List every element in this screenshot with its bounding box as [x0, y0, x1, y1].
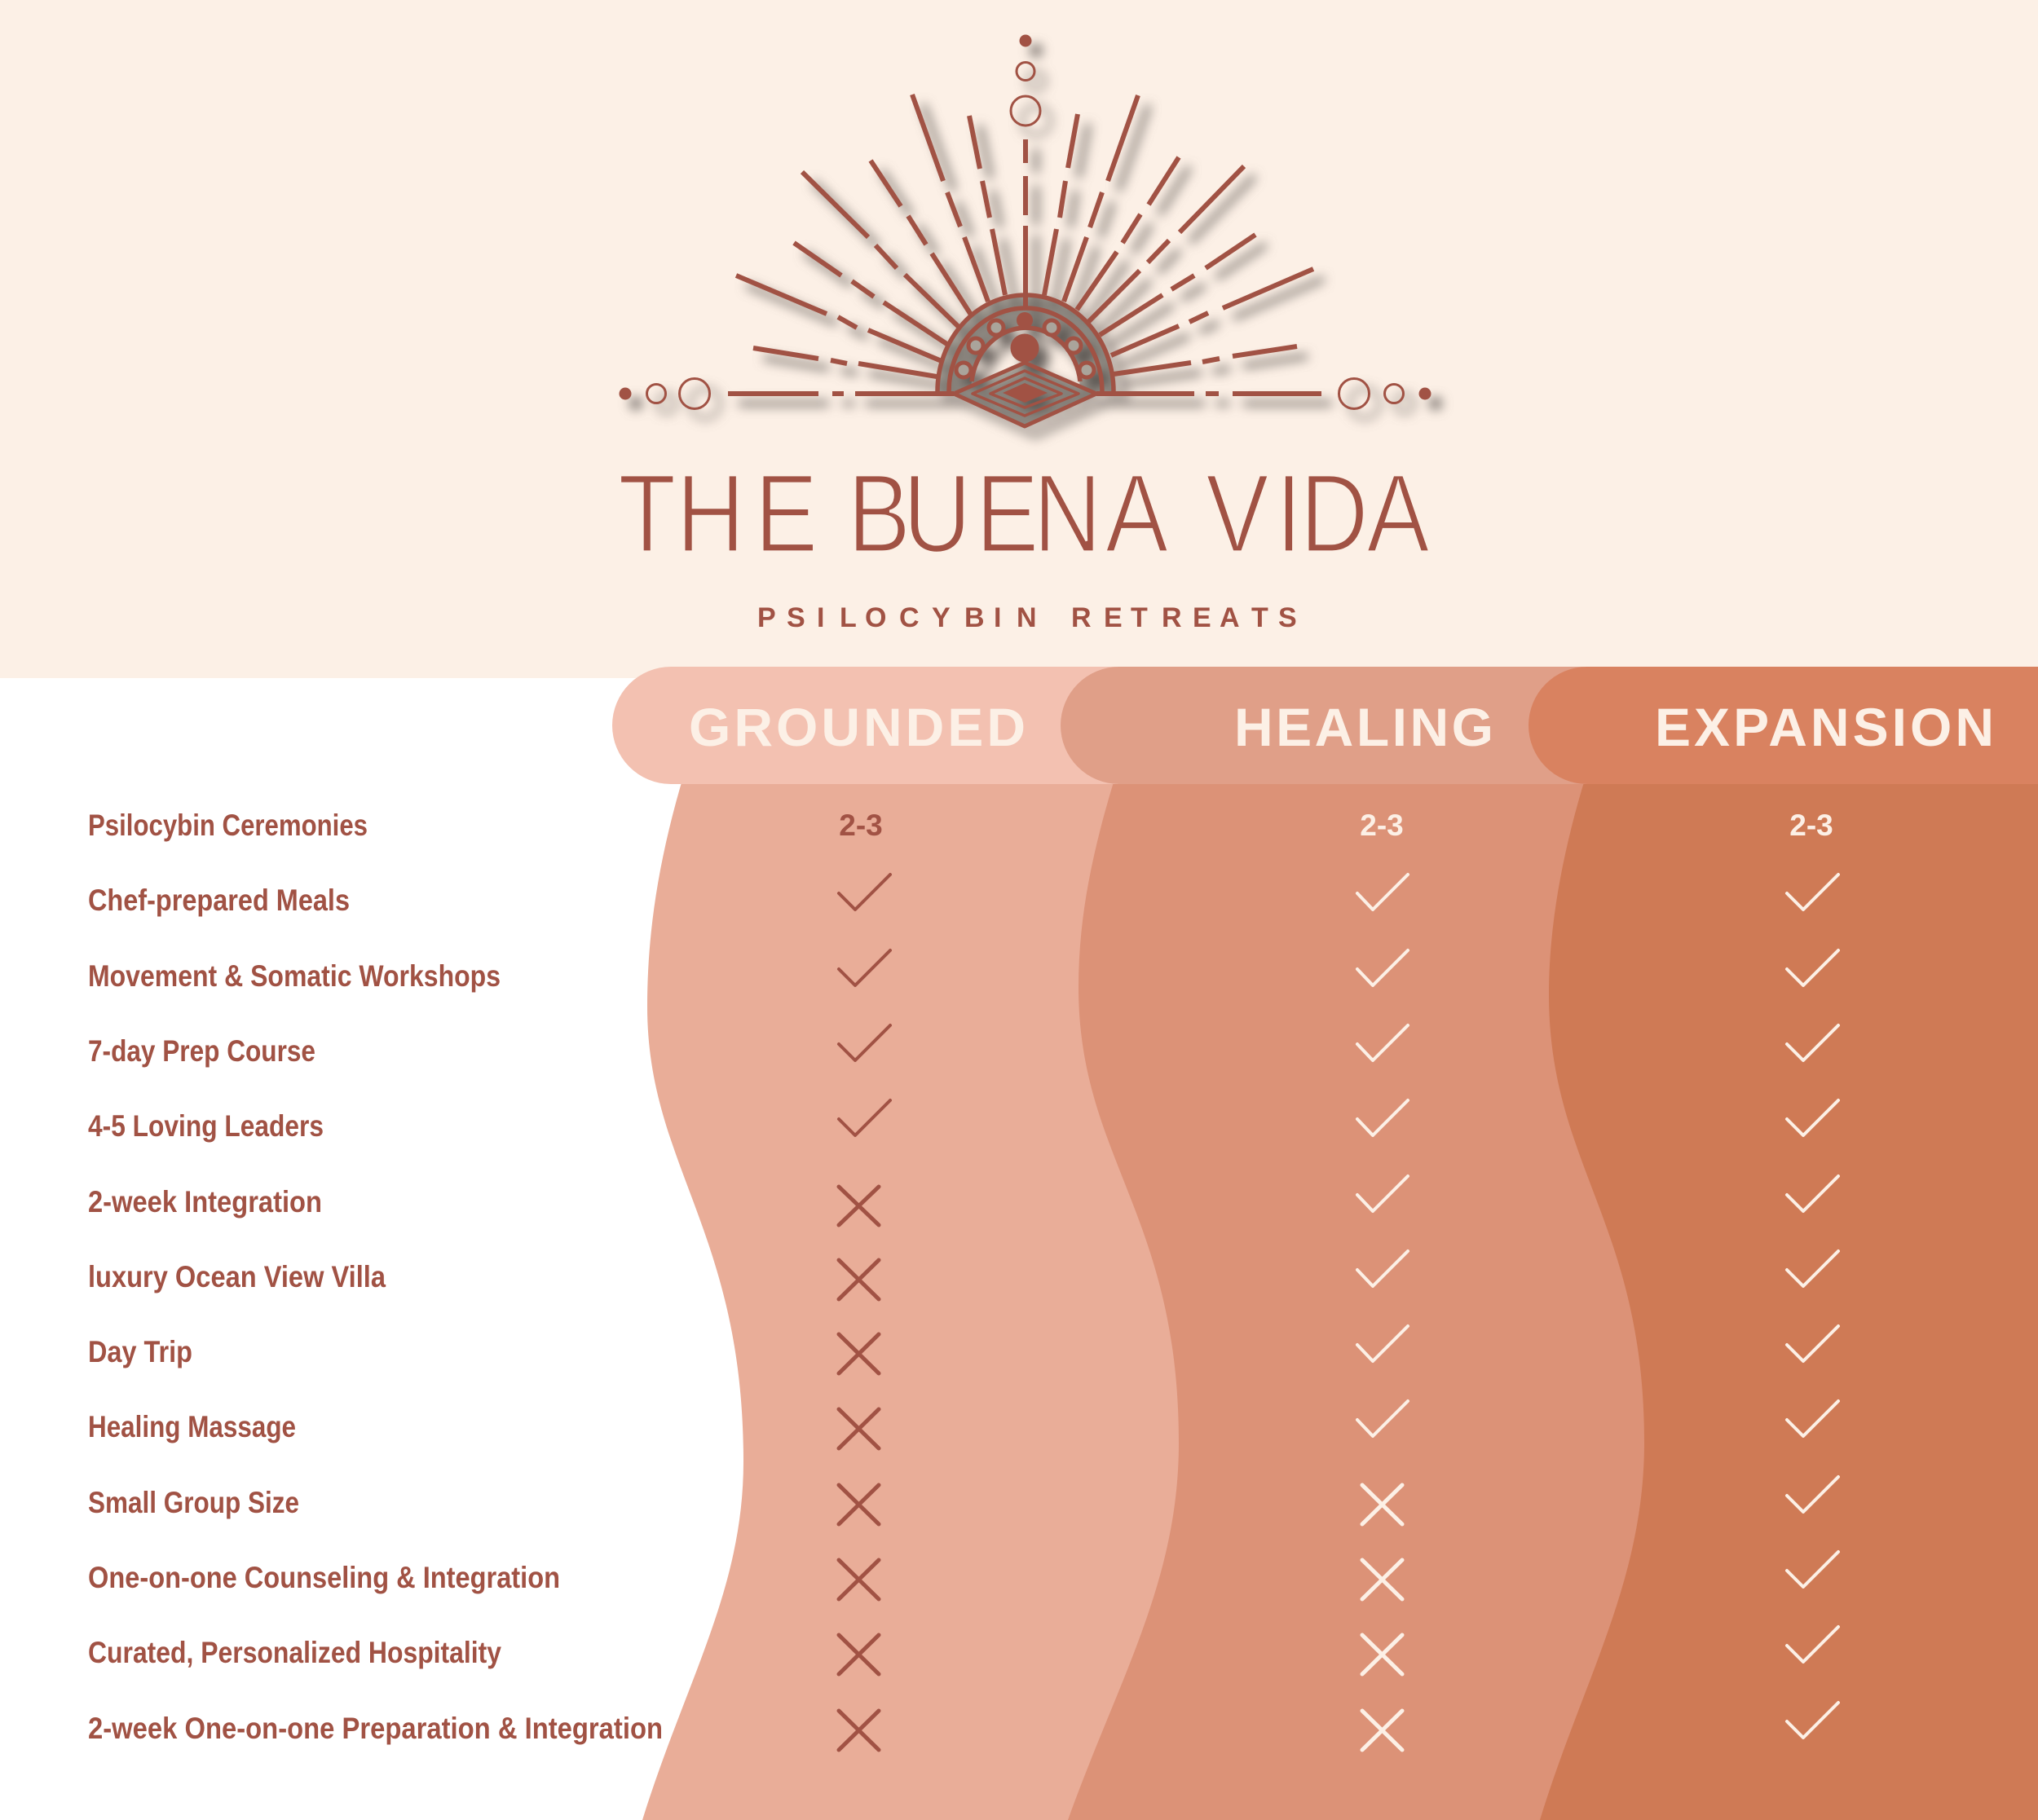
tab: expansion: EXPANSION [1655, 697, 1994, 757]
feature labels: Chef-prepared Meals [88, 884, 350, 917]
feature labels: Healing Massage [88, 1410, 296, 1443]
feature labels: Day Trip [88, 1335, 192, 1368]
feature labels: One-on-one Counseling & Integration [88, 1561, 560, 1594]
column wave: healing [1068, 774, 2038, 1820]
feature labels: 4-5 Loving Leaders [88, 1109, 324, 1143]
tab: healing: HEALING [1234, 697, 1493, 757]
subtitle: PSILOCYBIN RETREATS [757, 602, 1297, 633]
header background [0, 0, 2038, 678]
feature labels: 2-week One-on-one Preparation & Integration [88, 1712, 663, 1745]
column marks: expansion: 2-3 [1789, 809, 1833, 842]
feature labels: Curated, Personalized Hospitality [88, 1636, 501, 1669]
column marks: expansion [1787, 809, 1838, 1738]
tab: healing [1061, 667, 1794, 784]
column marks: healing [1357, 809, 1408, 1750]
tab: grounded [612, 667, 1264, 784]
column marks: healing: 2-3 [1360, 809, 1404, 842]
title: THE BUENA VIDA [618, 451, 1430, 575]
feature labels [88, 809, 663, 1745]
column wave: grounded [642, 774, 2038, 1820]
logo: sunburst emblem [620, 34, 1431, 426]
feature labels: Movement & Somatic Workshops [88, 959, 501, 993]
feature labels: 7-day Prep Course [88, 1034, 315, 1068]
feature labels: luxury Ocean View Villa [88, 1260, 386, 1293]
tab: expansion [1528, 667, 2038, 784]
column wave: expansion [1540, 774, 2038, 1820]
feature labels: Psilocybin Ceremonies [88, 809, 368, 842]
column marks: grounded [839, 809, 890, 1750]
feature labels: Small Group Size [88, 1486, 299, 1519]
feature labels: 2-week Integration [88, 1185, 322, 1218]
tab: grounded: GROUNDED [689, 697, 1026, 757]
column marks: grounded: 2-3 [839, 809, 883, 842]
